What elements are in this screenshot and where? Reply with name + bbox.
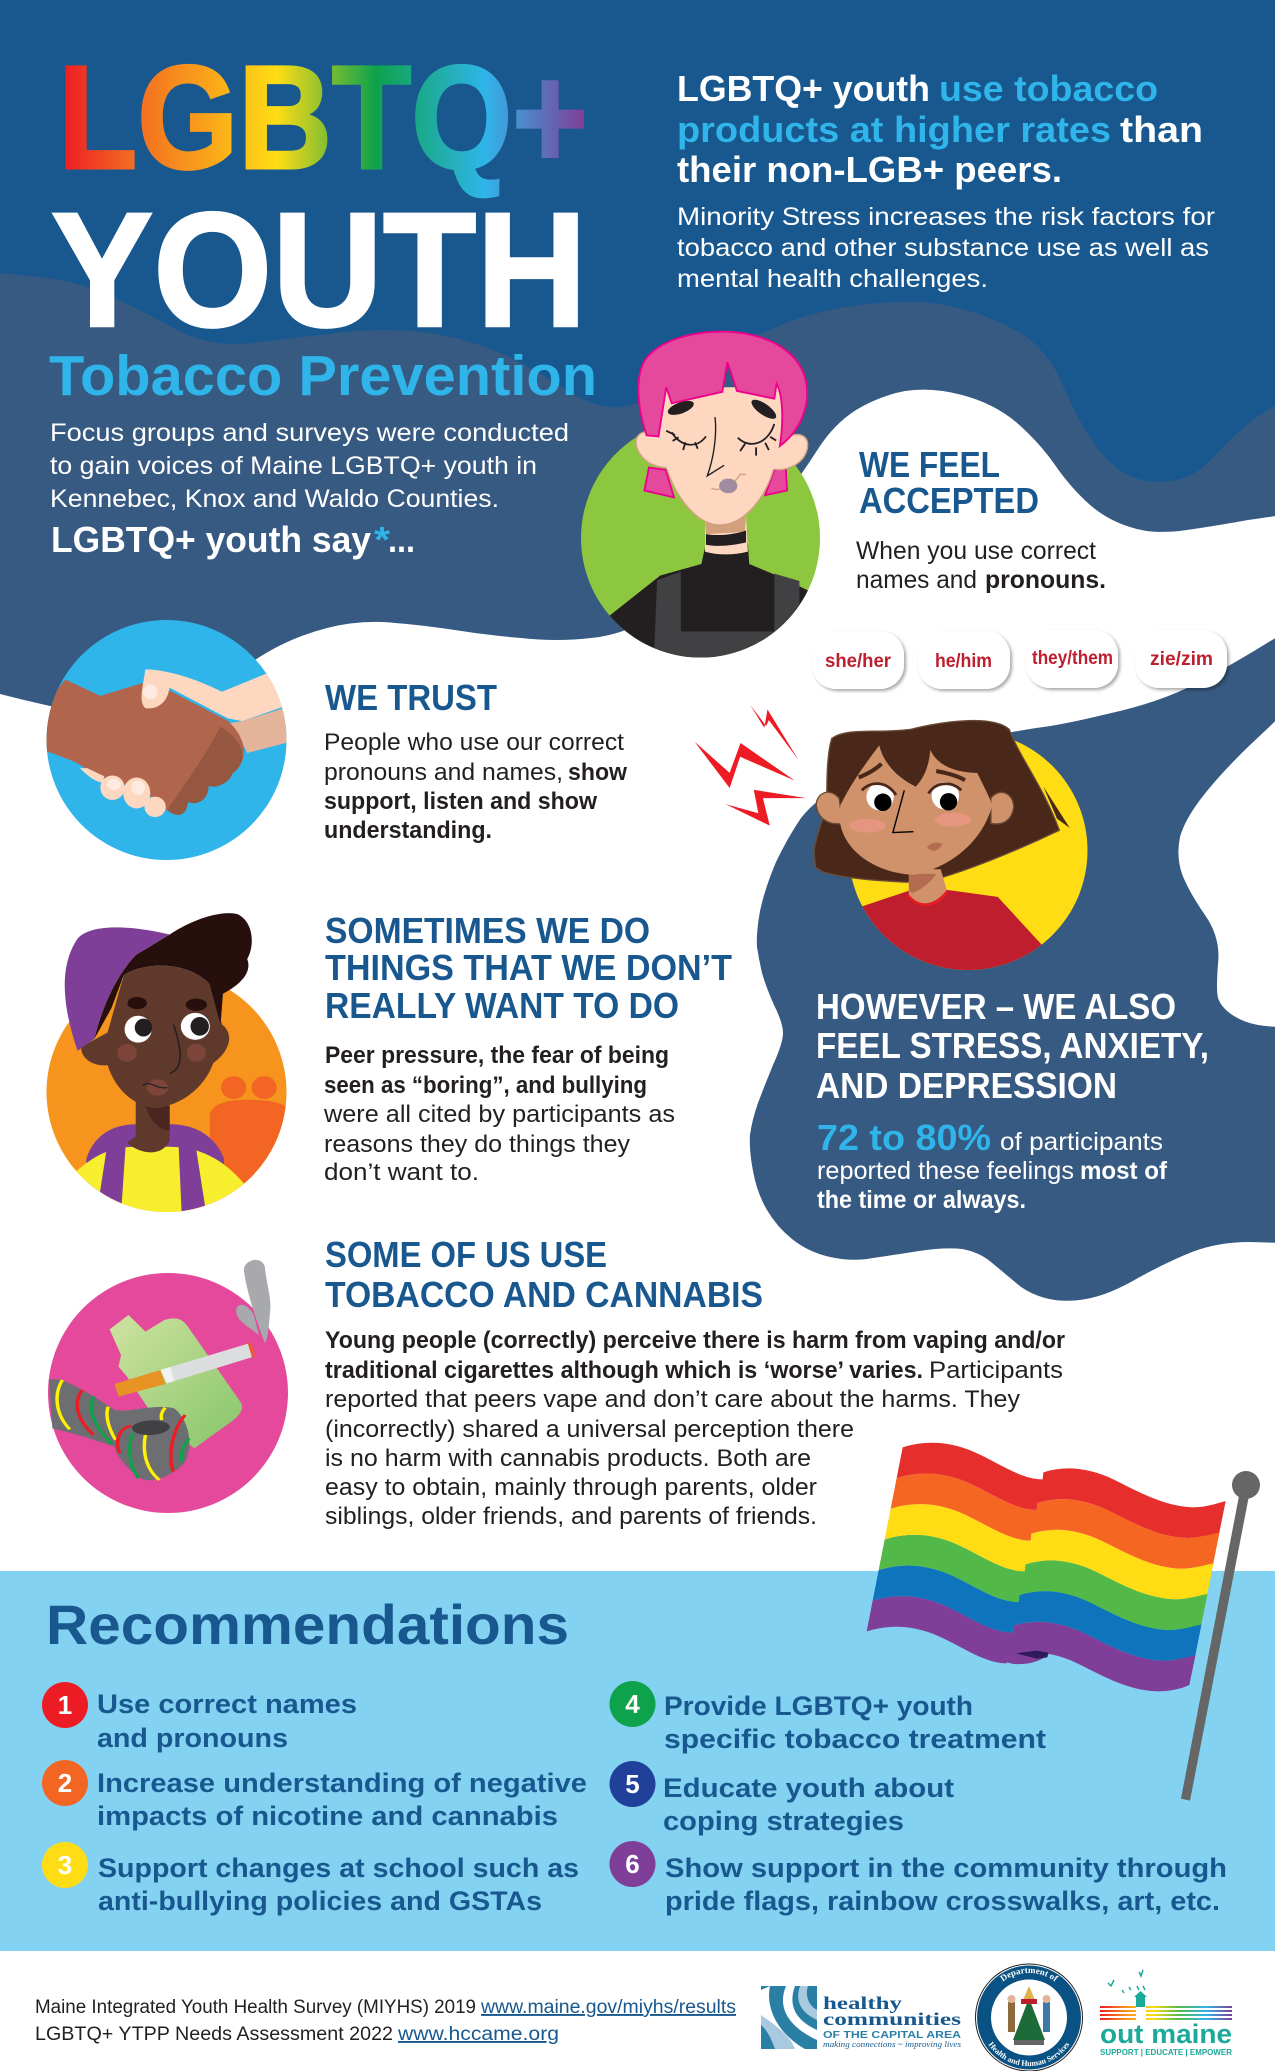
title: YOUTH: YOUTH [51,178,587,361]
recommendation 3 [42,1842,579,1916]
text: tobacco body: (incorrectly) shared a universal perception there [325,1416,854,1443]
stat text: the time or always. [817,1186,1026,1214]
logo: department of health and human services seal: Department of [1000,1968,1059,1982]
icon: number 2 [42,1760,88,1806]
illustration: pink-haired person [581,332,820,667]
icon: number 5 [610,1761,656,1807]
top right body text: Minority Stress increases the risk factors for [677,203,1215,231]
text: tobacco body: siblings, older friends, and parents of friends. [325,1503,817,1530]
text: when you use correct names: When you use correct [856,537,1096,565]
heading: some of us use tobacco and cannabis: SOME OF US USE [325,1234,607,1275]
text: when you use correct names [856,537,1106,594]
logo: healthy communities: OF THE CAPITAL AREA [823,2030,961,2041]
icon: number 1: 1 [58,1690,72,1720]
logo: out maine: out maine [1100,2019,1232,2049]
recommendation 6: pride flags, rainbow crosswalks, art, etc. [665,1886,1220,1916]
pronoun pills: zie/zim [1150,649,1213,670]
background: lighter slate wave [0,273,1275,1300]
text: tobacco body: traditional cigarettes although which is ‘worse’ varies. [325,1357,923,1384]
top right body text [677,203,1215,293]
heading: however: HOWEVER – WE ALSO [816,986,1176,1027]
background: navy header [0,0,1275,1300]
top right body text: mental health challenges. [677,265,988,293]
heading: we feel accepted [859,444,1039,521]
icon: number 6: 6 [625,1849,640,1879]
text: when you use correct names: pronouns. [985,566,1106,594]
heading: however: FEEL STRESS, ANXIETY, [816,1025,1209,1066]
panel: sometimes we do things [323,910,732,1186]
heading: we trust: WE TRUST [325,677,497,718]
heading: we feel accepted: ACCEPTED [859,480,1039,521]
top right headline: their non-LGB+ peers. [677,149,1062,190]
panel: recommendations band [0,1571,1275,1951]
text: peer pressure body [323,1042,675,1186]
logo: department of health and human services seal [975,1964,1083,2071]
logo: out maine: SUPPORT | EDUCATE | EMPOWER [1100,2048,1232,2057]
recommendation 6: Show support in the community through [665,1853,1227,1883]
icon: number 1 [42,1682,88,1728]
recommendation 5 [610,1761,954,1836]
logo: department of health and human services seal: Health and Human Services [988,2041,1070,2066]
icon: lightning bolts [695,705,806,826]
recommendation 4 [610,1681,1046,1754]
text: we trust body: show [568,759,627,786]
footer sources: www.maine.gov/miyhs/results [480,1997,736,2018]
heading: sometimes we do things: REALLY WANT TO DO [325,985,679,1026]
top right headline: LGBTQ+ youth [677,68,930,109]
text: peer pressure body: were all cited by participants as [323,1101,675,1128]
panel: we feel accepted [856,444,1106,594]
illustration: vape, cigarette and pipe [48,1260,288,1513]
heading: we feel accepted: WE FEEL [859,444,1000,485]
illustration: rainbow flag [867,1443,1260,1801]
top right headline: products at higher rates [677,109,1111,150]
icon: number 4: 4 [625,1689,640,1719]
intro text: to gain voices of Maine LGBTQ+ youth in [50,452,537,480]
recommendation 6 [610,1841,1227,1916]
recommendation 5: coping strategies [663,1806,904,1836]
stat text: most of [1080,1157,1168,1185]
recommendation 3: Support changes at school such as [98,1853,579,1883]
pronoun pills: they/them [1032,648,1113,669]
logo: healthy communities: communities [823,2009,961,2029]
text: we trust body: People who use our correct [324,729,624,756]
recommendation 4: specific tobacco treatment [664,1724,1046,1754]
text: we trust body [324,729,627,844]
top right body text: tobacco and other substance use as well as [677,234,1209,262]
heading: sometimes we do things: SOMETIMES WE DO [325,910,650,951]
text: peer pressure body: don’t want to. [324,1159,479,1186]
top right headline: than [1120,109,1203,150]
logo: healthy communities [759,1986,961,2049]
recommendation 4: Provide LGBTQ+ youth [664,1691,973,1721]
illustration: youth with cap and backpack [46,913,291,1220]
text: peer pressure body: Peer pressure, the fear of being [325,1042,669,1069]
logo: healthy communities: healthy [823,1993,902,2013]
lead-in: LGBTQ+ youth say: ... [388,519,415,560]
top right headline: use tobacco [939,68,1158,109]
lead-in: LGBTQ+ youth say: LGBTQ+ youth say [51,519,371,560]
panel: we trust [324,677,627,844]
pronoun pills: she/her [825,651,892,672]
footer sources: LGBTQ+ YTPP Needs Assessment 2022 [35,2024,393,2045]
pronoun pills: he/him [935,651,992,672]
heading: however [816,986,1209,1106]
icon: number 3 [42,1842,88,1888]
title block [49,36,597,408]
intro text [50,419,569,513]
panel: however we also feel stress [816,986,1209,1214]
intro text: Focus groups and surveys were conducted [50,419,569,447]
heading: some of us use tobacco and cannabis: TOBACCO AND CANNABIS [325,1274,763,1315]
text: tobacco body: is no harm with cannabis products. Both are [325,1445,811,1472]
text: peer pressure body: reasons they do things they [324,1131,630,1158]
text: tobacco body: Young people (correctly) perceive there is harm from vaping and/or [325,1327,1065,1354]
text: tobacco body: easy to obtain, mainly through parents, older [325,1474,817,1501]
footer sources: Maine Integrated Youth Health Survey (MIYHS) 2019 [35,1997,476,2018]
panel: some of us use tobacco and cannabis [325,1234,1065,1530]
heading: however: AND DEPRESSION [816,1065,1117,1106]
text: we trust body: understanding. [324,817,492,844]
logo: out maine [1100,1970,1232,2057]
icon: number 2: 2 [58,1768,72,1798]
statistic: 72 to 80%: 72 to 80% [817,1117,991,1158]
icon: number 4 [610,1681,656,1727]
lead-in: LGBTQ+ youth say: * [374,519,390,560]
icon: number 3: 3 [58,1850,72,1880]
text: peer pressure body: seen as “boring”, and bullying [324,1072,647,1099]
icon: number 6 [610,1841,656,1887]
text: tobacco body: Participants [929,1357,1063,1384]
recommendation 1: Use correct names [97,1689,357,1719]
text: we trust body: pronouns and names, [324,759,563,786]
recommendation 1 [42,1682,357,1753]
recommendation 3: anti-bullying policies and GSTAs [98,1886,542,1916]
text: tobacco body: reported that peers vape and don’t care about the harms. They [325,1386,1020,1413]
text: we trust body: support, listen and show [324,788,597,815]
stat text: of participants [1000,1128,1163,1156]
recommendation 2: Increase understanding of negative [97,1768,587,1798]
pronoun pills [812,630,1227,689]
illustration: stressed person with lightning [694,705,1088,970]
recommendation 2: impacts of nicotine and cannabis [97,1801,558,1831]
stat text: reported these feelings [817,1157,1074,1185]
heading: recommendations: Recommendations [46,1593,569,1656]
heading: some of us use tobacco and cannabis [325,1234,763,1315]
footer sources: www.hccame.org [397,2024,559,2045]
illustration: handshake [44,620,291,860]
intro text: Kennebec, Knox and Waldo Counties. [50,485,499,513]
subtitle: Tobacco Prevention: Tobacco Prevention [49,344,597,408]
logo: healthy communities: making connections ~ improving lives [823,2040,961,2049]
recommendation 5: Educate youth about [663,1773,954,1803]
heading: sometimes we do things [325,910,732,1026]
recommendation 2 [42,1760,587,1831]
title: LGBTQ+: LGBTQ+ [58,36,588,200]
recommendation 1: and pronouns [97,1723,288,1753]
text: when you use correct names: names and [856,566,977,594]
heading: sometimes we do things: THINGS THAT WE DON’T [325,947,732,988]
text: tobacco body [325,1327,1065,1530]
footer sources [35,1997,736,2045]
panel background: stress blob [750,632,1275,1301]
stat text [817,1128,1168,1214]
top right headline [677,68,1203,190]
icon: number 5: 5 [625,1769,640,1799]
